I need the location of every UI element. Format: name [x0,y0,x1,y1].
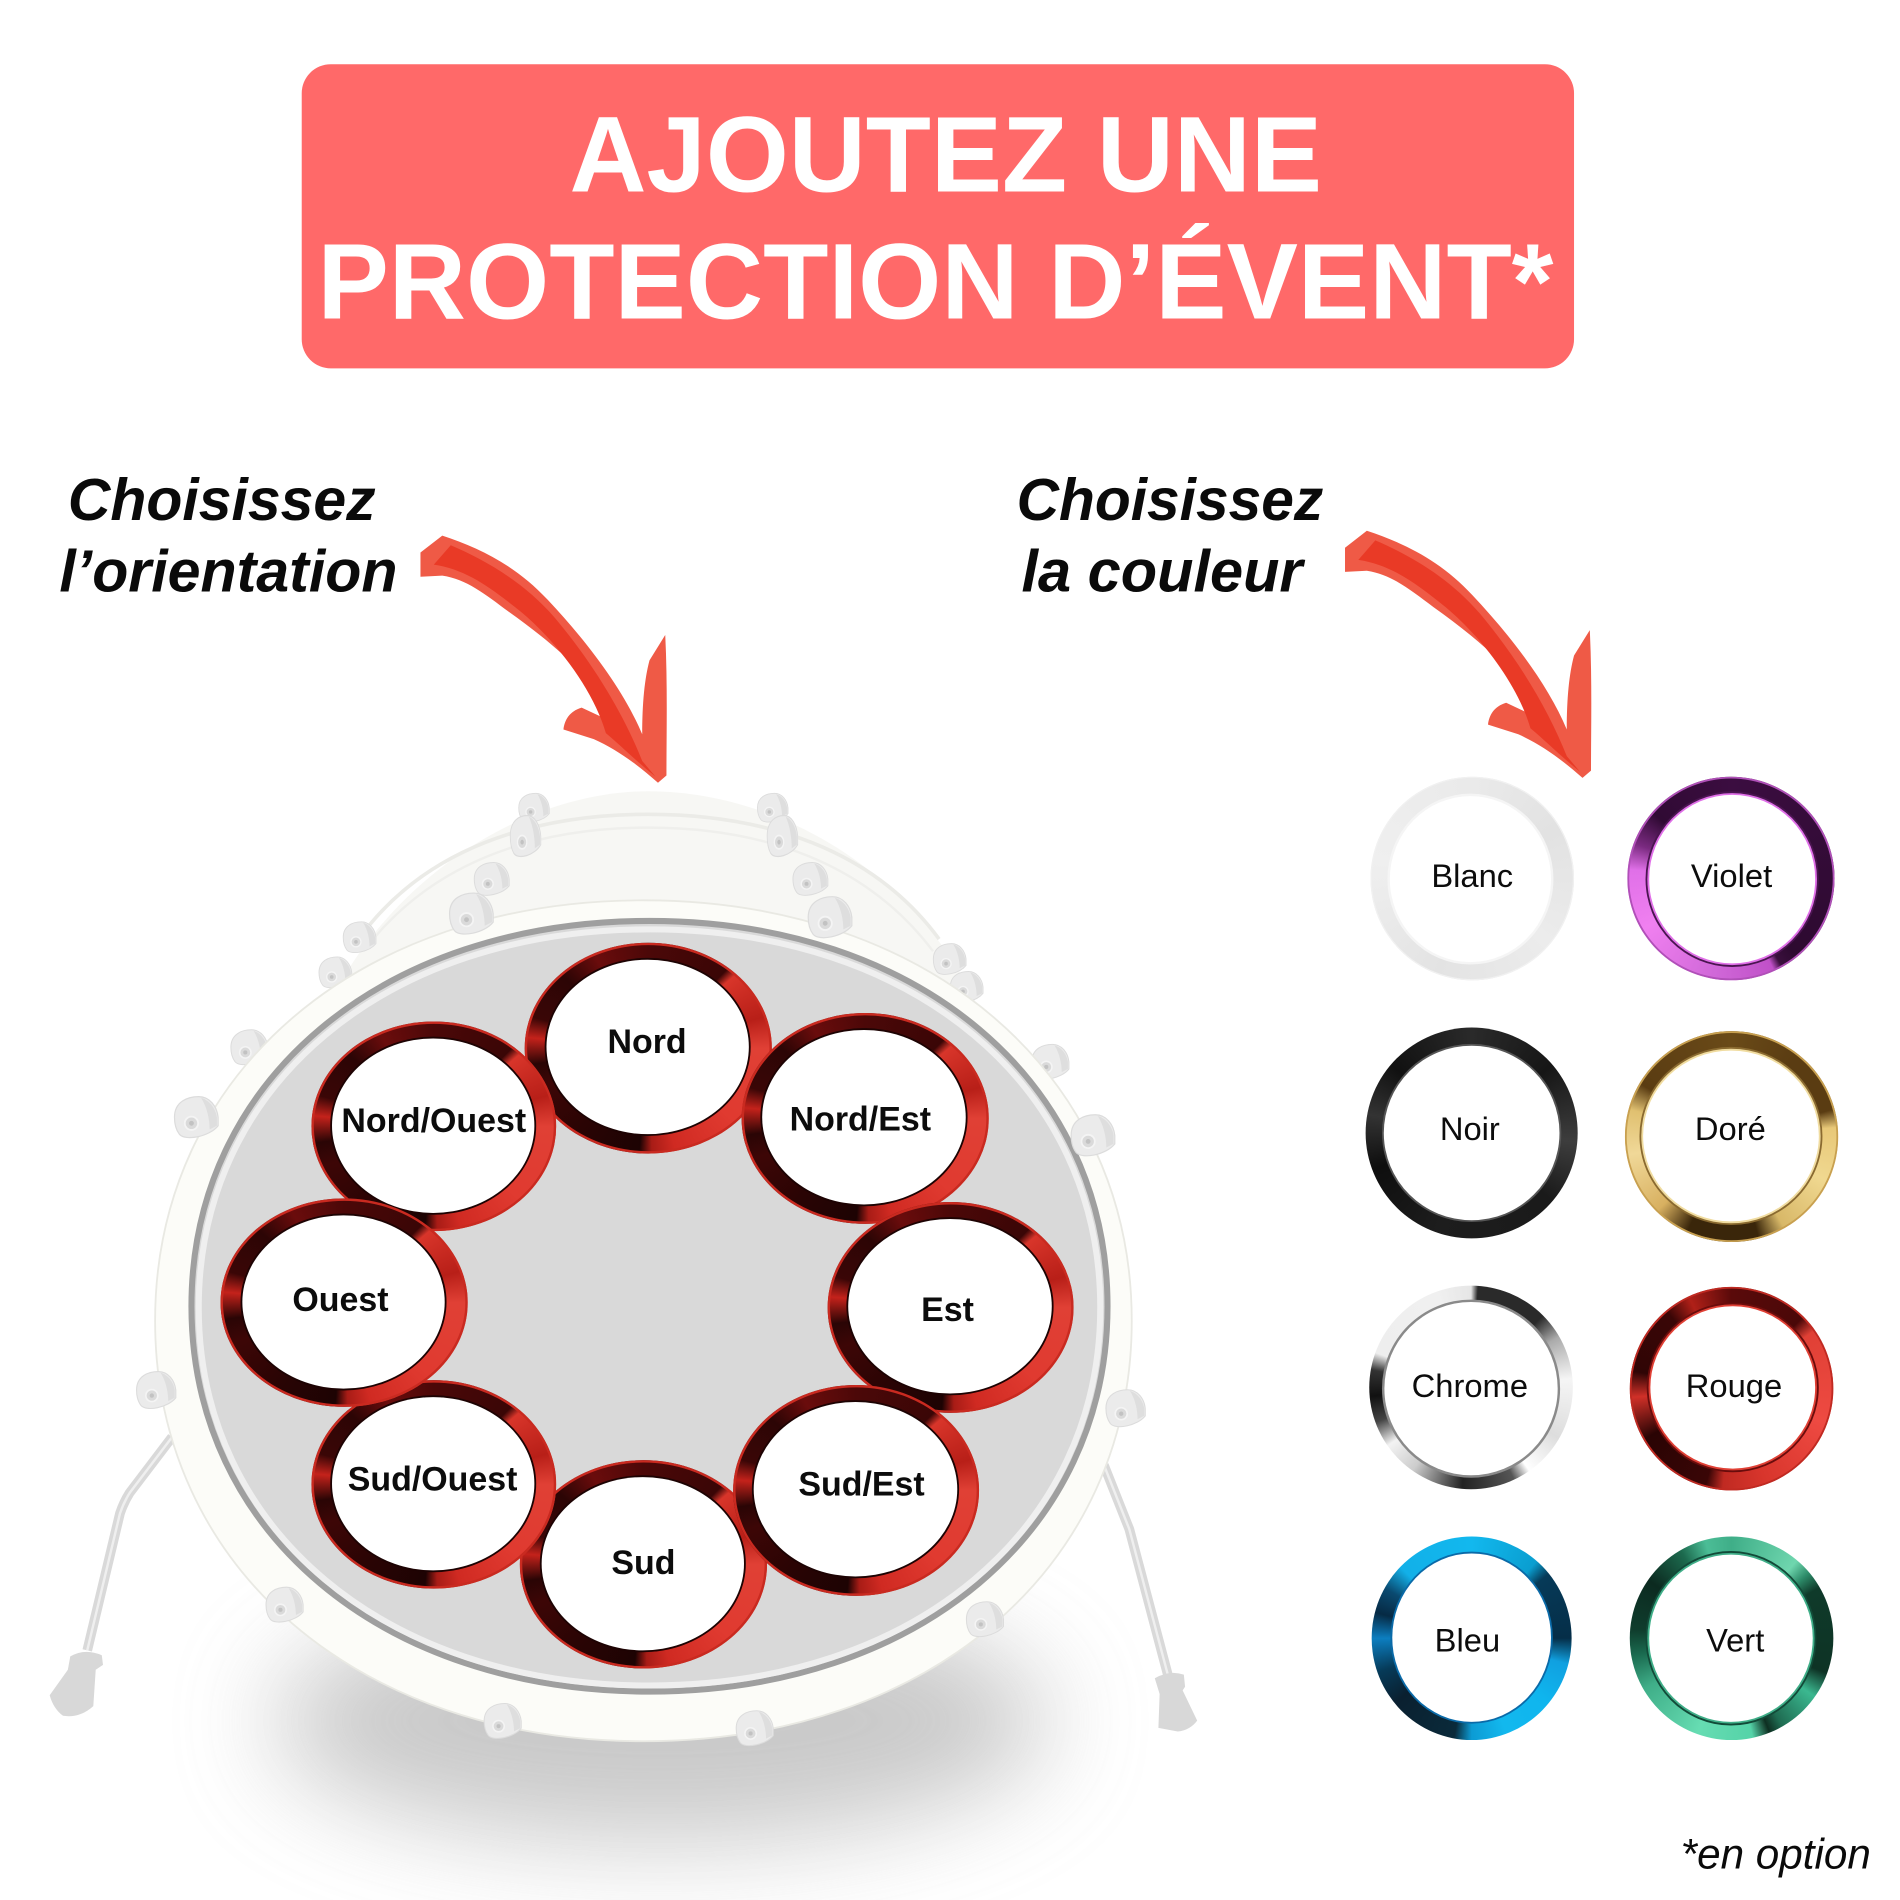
ring: Nord/Est [742,1013,989,1224]
ring: Sud/Ouest: Sud/Ouest [348,1460,517,1497]
rear shell [231,791,1069,1079]
colour swatch: Doré [1625,1031,1838,1242]
ring: Sud [520,1460,767,1669]
colour swatch: Violet [1627,777,1835,980]
left leg [50,1437,172,1716]
ring: Ouest [221,1198,468,1407]
ring: Nord/Ouest: Nord/Ouest [341,1101,526,1139]
colour swatch: Violet: Violet [1691,857,1772,894]
right leg [1104,1465,1197,1732]
colour swatch: Blanc [1370,777,1574,980]
colour swatch: Rouge [1630,1287,1833,1490]
drum illustration [50,791,1197,1842]
ring: Sud/Est: Sud/Est [798,1465,925,1503]
heading: colour: la couleur [1021,537,1306,604]
colour swatch: Chrome: Chrome [1412,1368,1528,1405]
colour swatch: Bleu [1372,1536,1572,1740]
ring: Nord [525,943,772,1154]
heading: orientation: l’orientation [59,537,397,604]
colour swatch: Chrome [1369,1286,1573,1489]
arrow: towards colours [1345,531,1591,778]
colour swatch: Doré: Doré [1695,1111,1766,1148]
drum head [191,921,1108,1692]
ring: Sud/Est [733,1385,979,1596]
title line 1: AJOUTEZ UNE [570,93,1322,214]
footnote: *en option [1681,1830,1871,1877]
ring: Sud: Sud [611,1544,675,1581]
ring: Est [828,1202,1074,1413]
heading: orientation: Choisissez [68,466,376,533]
ring: Sud/Ouest [311,1380,556,1589]
floor shadow [273,1599,1048,1842]
hoop claws [137,893,1145,1746]
hoop [155,900,1132,1741]
heading: orientation [59,466,397,604]
title line 2: PROTECTION D’ÉVENT* [317,221,1553,342]
heading: colour [1017,466,1324,604]
title banner [302,64,1574,368]
colour swatch: Noir: Noir [1440,1111,1500,1148]
arrow: towards drum [420,536,667,783]
colour swatch: Bleu: Bleu [1435,1622,1500,1658]
ring: Nord/Est: Nord/Est [790,1100,931,1138]
colour swatch: Vert: Vert [1706,1622,1764,1658]
colour swatch: Vert [1630,1536,1833,1740]
ring: Nord: Nord [607,1023,687,1061]
ring: Ouest: Ouest [292,1281,389,1319]
colour swatch: Blanc: Blanc [1431,857,1513,894]
colour swatch: Rouge: Rouge [1686,1368,1782,1405]
colour swatch: Noir [1366,1028,1578,1238]
ring: Nord/Ouest [311,1021,556,1231]
ring: Est: Est [921,1290,974,1328]
heading: colour: Choisissez [1017,466,1324,533]
